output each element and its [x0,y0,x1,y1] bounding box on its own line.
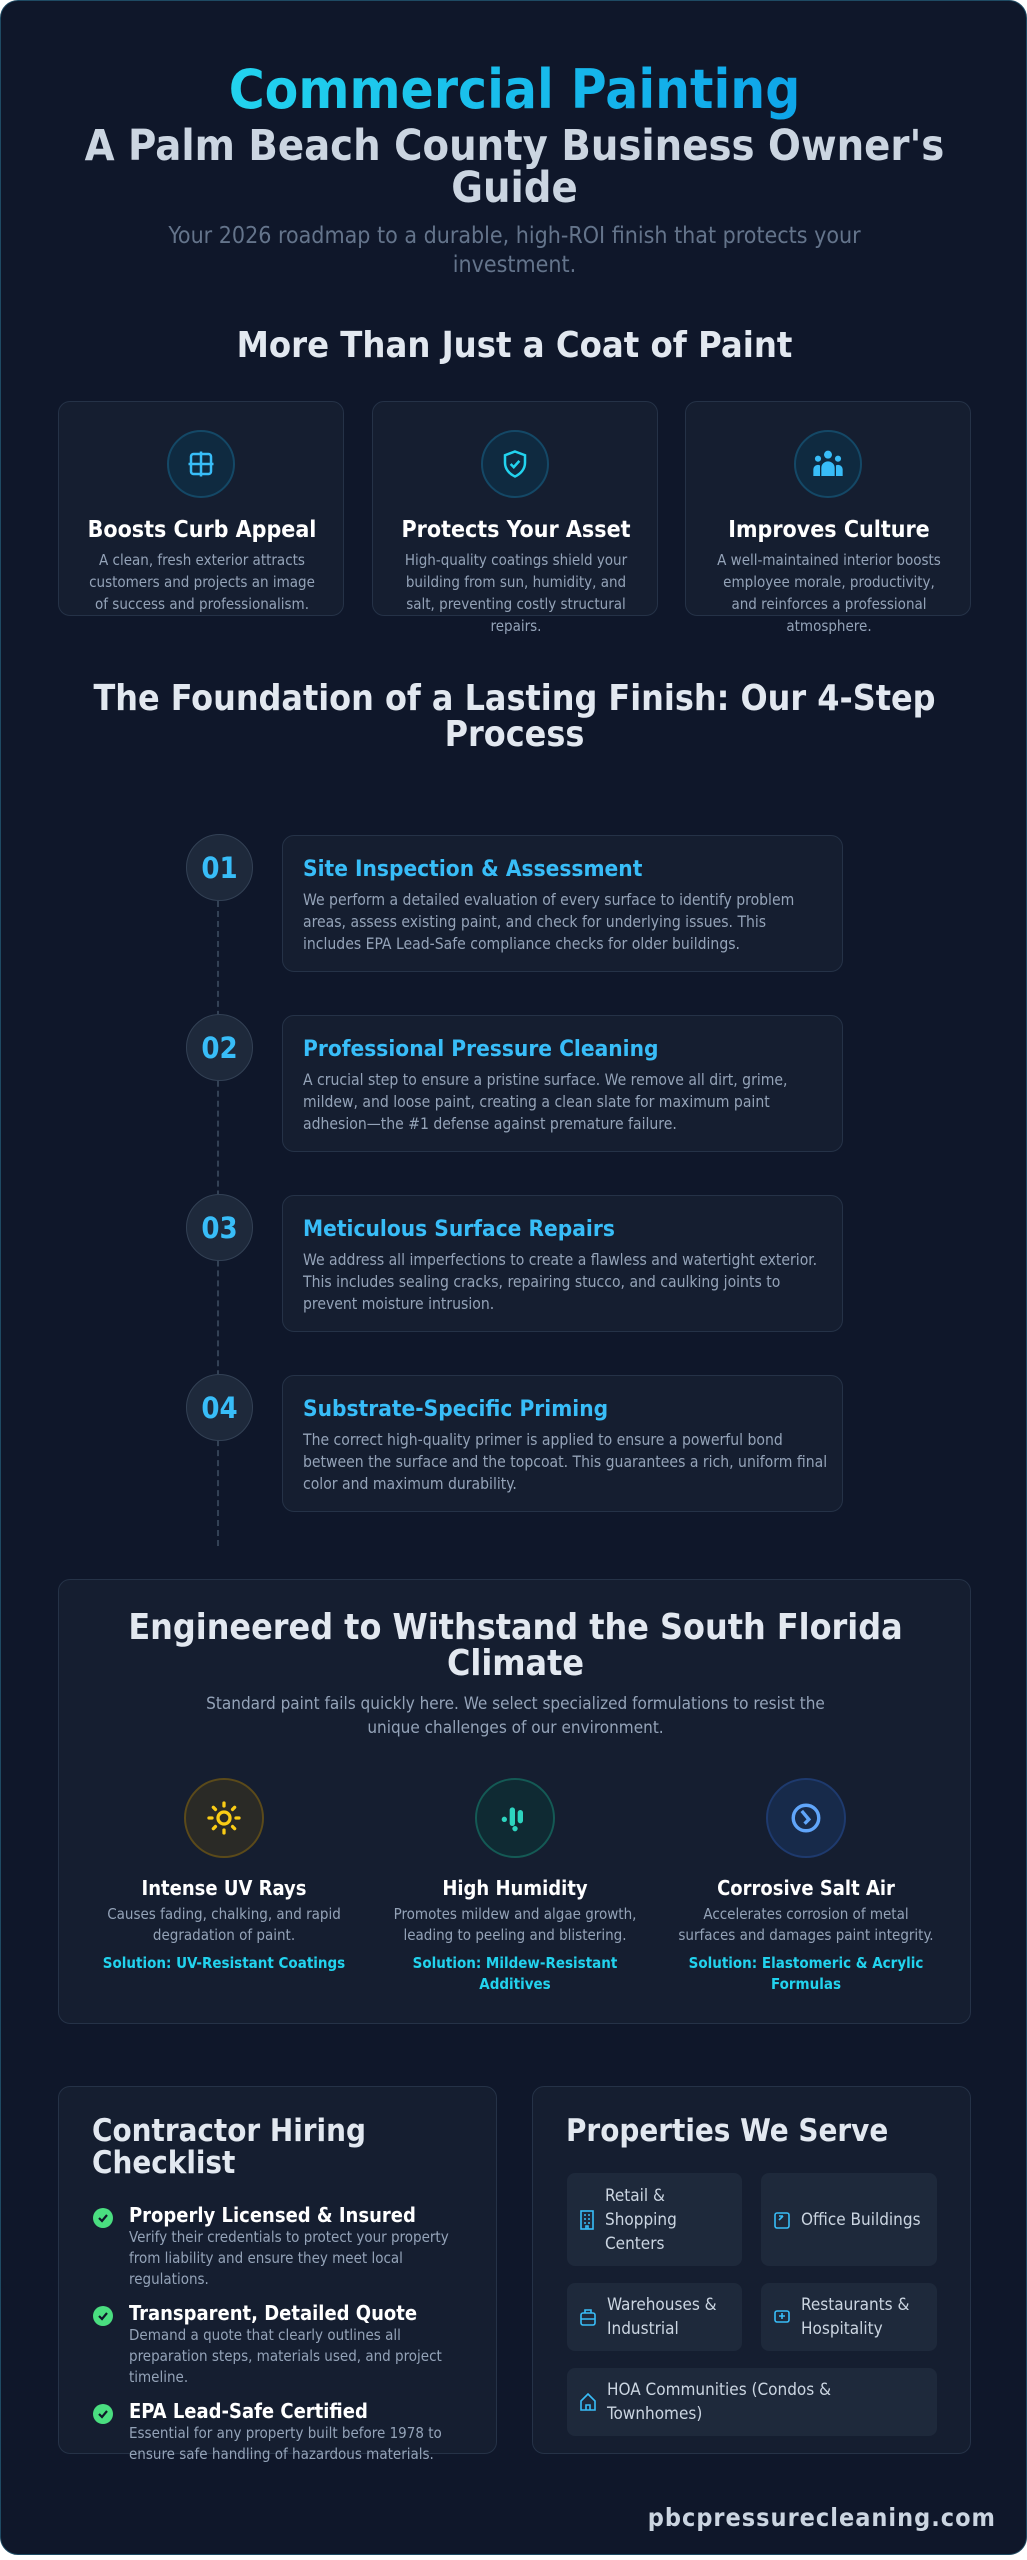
step 4 [186,1374,843,1512]
card 1: We perform a detailed evaluation of every surface to identify problem areas, assess existing paint, and check for underlying issues. This includes EPA Lead-Safe compliance checks for older buildings. [303,891,794,953]
tile: office: Office Buildings [801,2210,921,2230]
col: salt: Accelerates corrosion of metal [703,1905,909,1923]
icon: people [794,430,862,498]
col: UV: Solution: UV-Resistant Coatings [103,1954,345,1972]
heading: process: The Foundation of a Lasting Finish: Our 4-Step Process [93,678,936,755]
panel: protects [372,401,658,616]
tile: retail: Retail & [605,2186,665,2206]
col: humidity: High Humidity [442,1876,588,1900]
card 4: The correct high-quality primer is applied to ensure a powerful bond between the surface and the topcoat. This guarantees a rich, uniform final color and maximum durability. [303,1431,827,1493]
card 2: A crucial step to ensure a pristine surface. We remove all dirt, grime, mildew, and loose paint, creating a clean slate for maximum paint adhesion—the #1 defense against premature failure. [303,1071,788,1133]
number 02 [186,1014,253,1081]
item 3: EPA Lead-Safe Certified [129,2399,368,2423]
item 1: Verify their credentials to protect your property from liability and ensure they meet local regulations. [129,2228,449,2288]
icon: shield [481,430,549,498]
number 04 [186,1374,253,1441]
icon: gauge [766,1778,846,1858]
number 01 [186,834,253,901]
tile: warehouses: Warehouses & [607,2295,717,2315]
col: UV [103,1778,345,1972]
number 02: 02 [201,1030,238,1064]
item 2: Transparent, Detailed Quote [129,2301,417,2325]
text: Improves Culture [728,517,930,543]
text [401,517,630,635]
icon: sun [184,1778,264,1858]
col: humidity: Additives [479,1975,551,1993]
text: A clean, fresh exterior attracts customers and projects an image of success and professionalism. [89,551,315,613]
panel: culture [685,401,971,616]
text [88,517,316,613]
tile: restaurants: Hospitality [801,2319,883,2339]
panel: curb appeal [58,401,344,616]
item 3 [93,2399,442,2463]
panel: properties [532,2086,971,2454]
card 4 [282,1375,843,1512]
tile: warehouses [567,2283,742,2351]
icon: check [93,2306,113,2326]
panel: checklist [58,2086,497,2454]
col: UV: Causes fading, chalking, and rapid degradation of paint. [107,1905,341,1944]
card 1 [282,835,843,972]
card 2: Professional Pressure Cleaning [303,1036,659,1062]
icon: droplets [475,1778,555,1858]
col: humidity: Promotes mildew and algae growth, leading to peeling and blistering. [394,1905,636,1944]
card 3: We address all imperfections to create a flawless and watertight exterior. This includes sealing cracks, repairing stucco, and caulking joints to prevent moisture intrusion. [303,1251,817,1313]
heading: checklist: Contractor Hiring Checklist [92,2113,366,2181]
tile: retail: Shopping [605,2210,677,2230]
tile: restaurants [761,2283,937,2351]
card 3 [282,1195,843,1332]
card 1: Site Inspection & Assessment [303,856,642,882]
tile: HOA: Townhomes) [607,2404,702,2424]
text: Protects Your Asset [401,517,630,543]
heading: properties: Properties We Serve [566,2113,888,2149]
number 03 [186,1194,253,1261]
number 04: 04 [201,1390,238,1424]
item 1: Properly Licensed & Insured [129,2203,416,2227]
col: salt: surfaces and damages paint integrity. [678,1926,934,1944]
icon: curb [167,430,235,498]
step 2 [186,1014,843,1152]
icon: check [93,2208,113,2228]
tile: HOA: HOA Communities (Condos & [607,2380,831,2400]
col: salt: Solution: Elastomeric & Acrylic [689,1954,923,1972]
col: salt: Formulas [771,1975,841,1993]
card 2 [282,1015,843,1152]
col: humidity: Solution: Mildew-Resistant [413,1954,617,1972]
number 01: 01 [201,850,238,884]
card 4: Substrate-Specific Priming [303,1396,608,1422]
tagline: Your 2026 roadmap to a durable, high-ROI finish that protects your investment. [168,223,861,278]
item 3: Essential for any property built before 1978 to ensure safe handling of hazardous materials. [129,2424,442,2463]
item 2: Demand a quote that clearly outlines all preparation steps, materials used, and project timeline. [129,2326,442,2386]
tile: office [761,2173,937,2266]
step 1 [186,834,843,972]
step 3 [186,1194,843,1332]
panel: climate [58,1579,971,2024]
text: High-quality coatings shield your building from sun, humidity, and salt, preventing costly structural repairs. [405,551,627,635]
text: Boosts Curb Appeal [88,517,316,543]
tile: HOA [567,2368,937,2436]
item 2 [93,2301,442,2386]
col: UV: Intense UV Rays [142,1876,306,1900]
number 03: 03 [201,1210,238,1244]
col: salt [678,1778,934,1993]
heading: more than paint: More Than Just a Coat of Paint [237,325,792,366]
icon: check [93,2404,113,2424]
col: salt: Corrosive Salt Air [717,1876,895,1900]
tile: warehouses: Industrial [607,2319,679,2339]
text: A well-maintained interior boosts employee morale, productivity, and reinforces a professional atmosphere. [717,551,941,635]
subtitle: A Palm Beach County Business Owner's Guide [85,121,944,213]
tile: retail: Centers [605,2234,664,2254]
col: humidity [394,1778,636,1993]
footer url: pbcpressurecleaning.com [648,2503,996,2532]
item 1 [93,2203,449,2288]
card 3: Meticulous Surface Repairs [303,1216,615,1242]
tile: restaurants: Restaurants & [801,2295,909,2315]
heading: climate: Engineered to Withstand the South Florida Climate [128,1607,903,1684]
climate intro: Standard paint fails quickly here. We select specialized formulations to resist the unique challenges of our environment. [206,1694,825,1738]
timeline line [217,901,219,1546]
title: Commercial Painting [229,57,800,121]
tile: retail [567,2173,742,2266]
